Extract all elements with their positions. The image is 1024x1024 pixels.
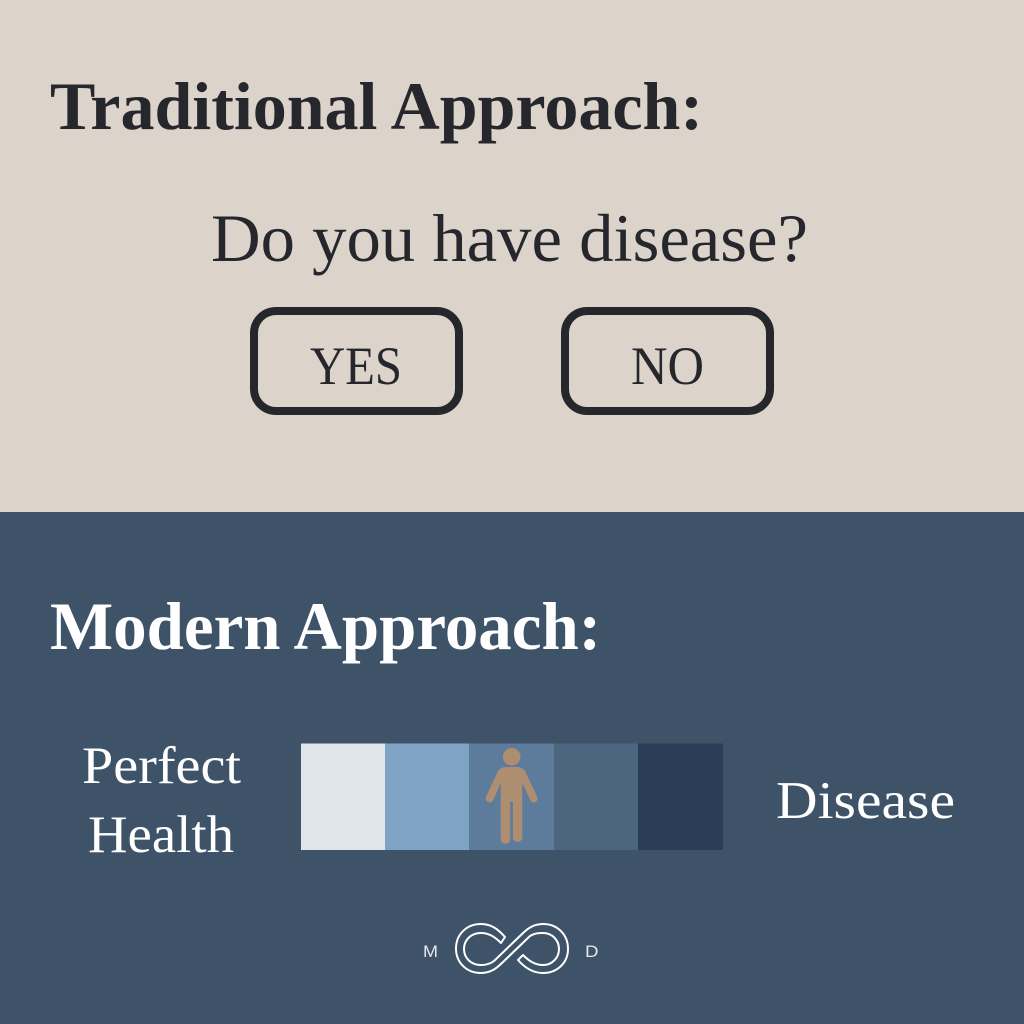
logo: infinity MD: D bbox=[585, 942, 598, 961]
health spectrum bar bbox=[301, 744, 723, 850]
heading: modern approach: Modern Approach: bbox=[50, 588, 601, 664]
button: yes: YES bbox=[310, 336, 402, 396]
button: yes bbox=[254, 311, 459, 411]
label: disease: Disease bbox=[776, 772, 955, 830]
panel: traditional approach bbox=[0, 0, 1024, 512]
logo: infinity MD bbox=[423, 924, 598, 973]
question text: Do you have disease? bbox=[211, 200, 808, 276]
icon: person bbox=[486, 748, 538, 844]
button: no: NO bbox=[631, 336, 704, 396]
label: perfect health bbox=[82, 737, 241, 864]
panel: modern approach bbox=[0, 512, 1024, 1024]
label: perfect health: Perfect bbox=[82, 737, 241, 795]
heading: traditional approach: Traditional Approach: bbox=[50, 68, 703, 144]
logo: infinity MD: M bbox=[423, 942, 438, 961]
label: perfect health: Health bbox=[88, 806, 234, 864]
button: no bbox=[565, 311, 770, 411]
